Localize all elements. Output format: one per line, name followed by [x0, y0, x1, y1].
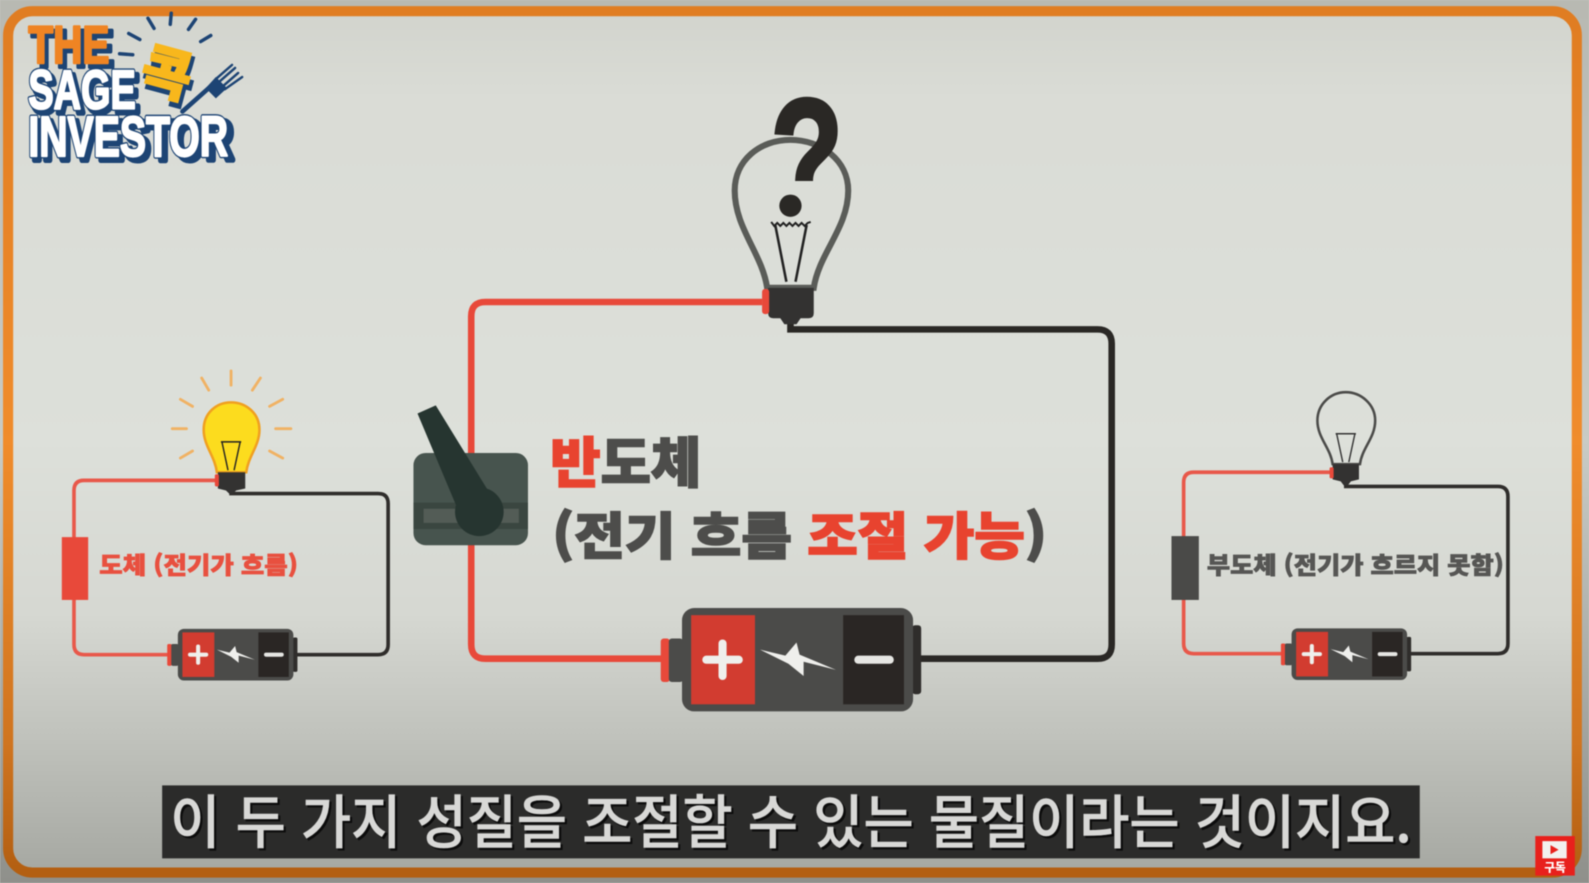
- toggle switch: [413, 405, 528, 545]
- logo word INVESTOR: INVESTOR: [28, 106, 228, 169]
- logo word SAGE: [28, 58, 140, 125]
- logo rays: [120, 13, 211, 55]
- right battery: [1281, 628, 1411, 680]
- logo word THE: THE: [31, 20, 115, 79]
- base: [218, 472, 245, 494]
- red contact: [215, 474, 219, 486]
- logo word THE: THE: [28, 16, 109, 75]
- center label: controllable: (전기 흐름 조절 가능 ): [552, 495, 1047, 569]
- lightbulb with question mark: [735, 64, 848, 324]
- question mark: ?: [770, 64, 843, 249]
- logo character: 콕: [135, 30, 204, 119]
- glass outline: [1317, 392, 1375, 464]
- filament: [221, 442, 241, 470]
- logo word SAGE: SAGE: [31, 63, 140, 125]
- subscribe badge: [1535, 836, 1575, 876]
- right red wire: [1184, 472, 1333, 654]
- red wire: [471, 302, 762, 659]
- right circuit: insulator: [1171, 392, 1508, 680]
- unlit bulb: [1317, 392, 1375, 485]
- left black wire: [231, 486, 388, 655]
- left material block: [62, 537, 88, 600]
- right material block: [1171, 536, 1199, 600]
- subtitle bar: [162, 776, 1420, 862]
- left label: conductor: 도체 (전기가 흐름): [99, 547, 298, 581]
- left circuit: conductor: [62, 371, 388, 681]
- right black wire: [1346, 480, 1508, 654]
- left battery: [167, 629, 297, 681]
- subtitle text: 이 두 가지 성질을 조절할 수 있는 물질이라는 것이지요.: [172, 778, 1414, 862]
- subtitle text: 이 두 가지 성질을 조절할 수 있는 물질이라는 것이지요.: [170, 776, 1412, 860]
- logo fork: [182, 65, 242, 111]
- light rays: [172, 371, 291, 458]
- logo word SAGE: SAGE: [28, 58, 136, 120]
- bulb glass: [735, 140, 848, 288]
- logo character: 콕: [133, 25, 202, 115]
- central circuit: [413, 64, 1112, 711]
- logo word INVESTOR: INVESTOR: [31, 110, 234, 173]
- subscribe text: 구독: [1544, 859, 1566, 876]
- bulb base: [768, 288, 814, 324]
- base: [1333, 464, 1359, 485]
- filament: [771, 222, 811, 282]
- lit bulb: [172, 371, 291, 494]
- glowing glass: [204, 402, 259, 472]
- red contact: [1330, 467, 1334, 478]
- logo word INVESTOR: INVESTOR: [28, 106, 228, 169]
- left red wire: [74, 480, 219, 655]
- logo: The Sage Investor: [28, 13, 242, 173]
- logo word SAGE: SAGE: [28, 58, 136, 120]
- center label: semiconductor: 반도체: [550, 419, 701, 498]
- logo word INVESTOR: [28, 106, 234, 173]
- right label: insulator: 부도체 (전기가 흐르지 못함): [1207, 547, 1504, 581]
- red contact: [762, 289, 769, 314]
- black wire: [790, 320, 1112, 659]
- question mark: [774, 96, 838, 218]
- center battery: [661, 608, 921, 711]
- filament: [1336, 434, 1356, 462]
